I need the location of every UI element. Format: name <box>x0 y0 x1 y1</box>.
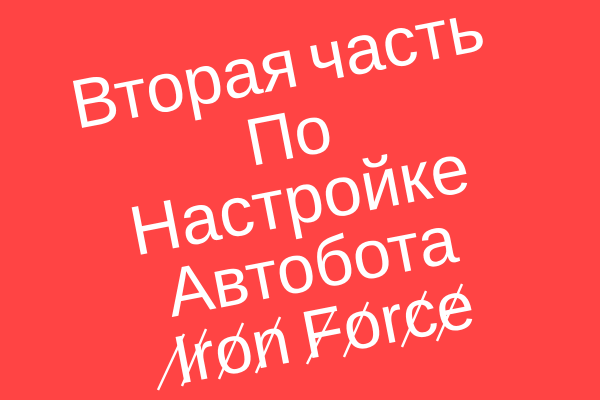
title line: По: По <box>240 91 338 181</box>
title line: Автобота: Автобота <box>160 200 464 332</box>
strike-through slashes over Iron Force <box>158 284 462 390</box>
title line: Настройке: Настройке <box>123 128 476 271</box>
title line: Iron Force: Iron Force <box>167 266 481 399</box>
